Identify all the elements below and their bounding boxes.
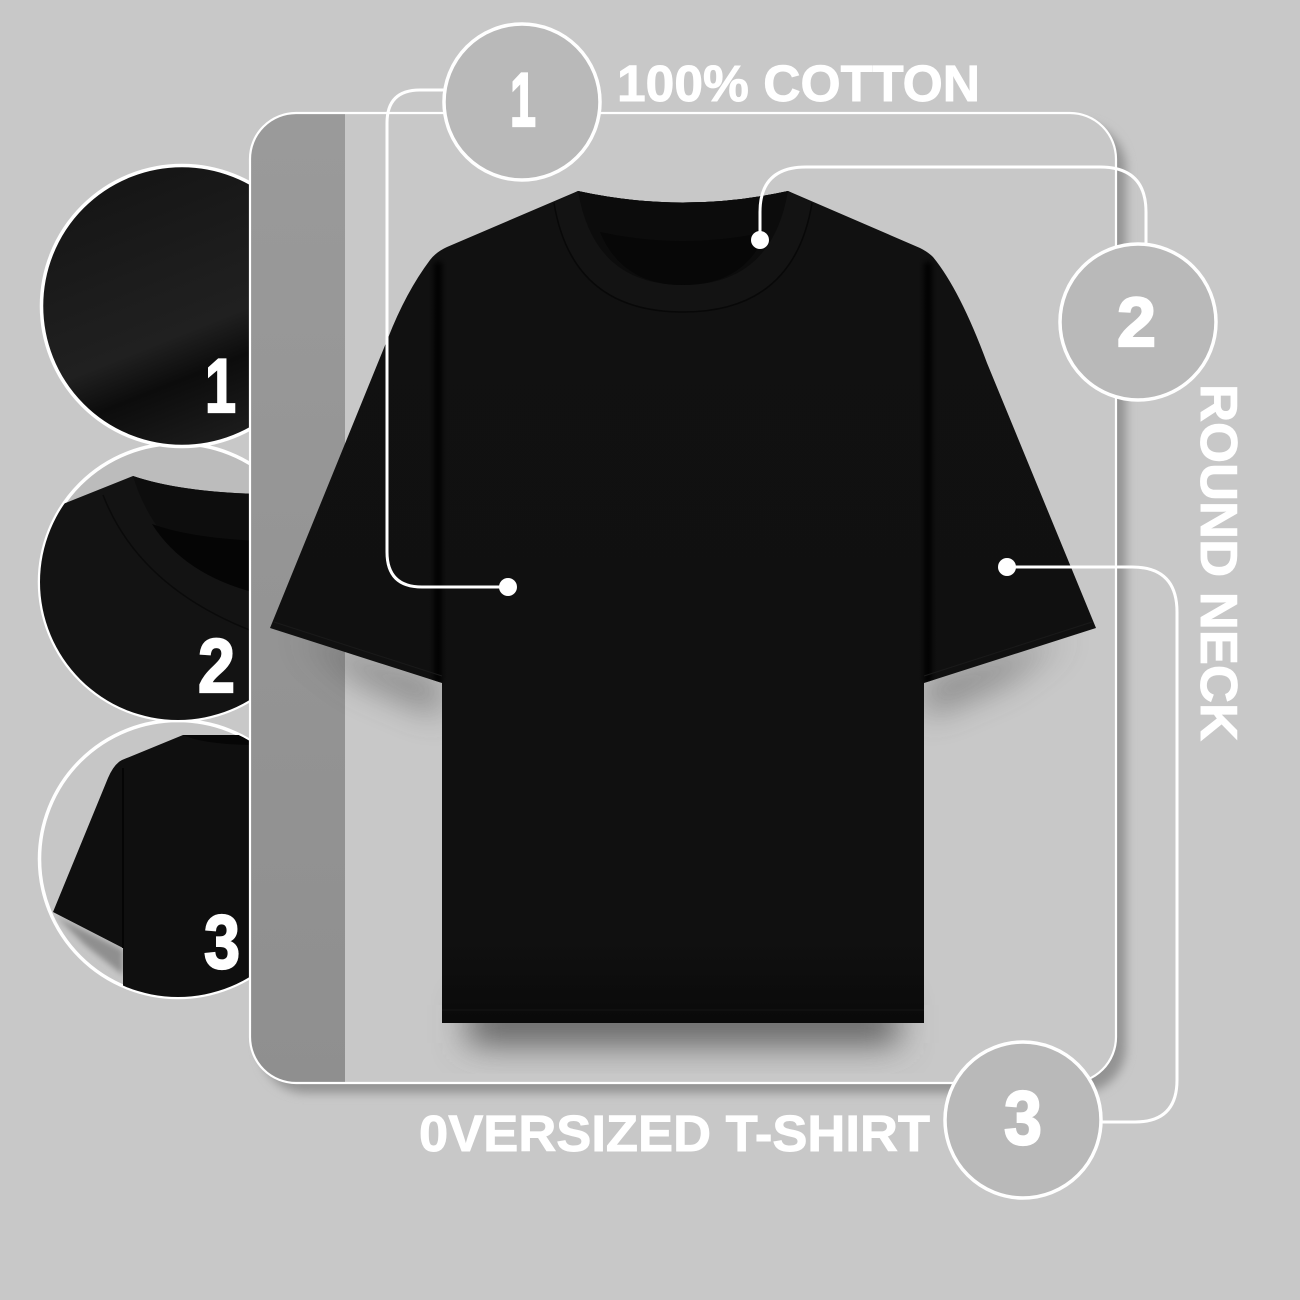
- t-shirt: [270, 191, 1096, 1023]
- detail circle 2: collar view: [38, 444, 249, 722]
- badge 2: [1060, 244, 1216, 400]
- collar seam: [554, 203, 812, 312]
- collar ribbing: [554, 191, 812, 312]
- badge 1: [444, 24, 600, 180]
- panel: backdrop with grey strip and rounded outline: [250, 113, 1126, 1093]
- detail circle 1: fabric close-up: [42, 166, 322, 446]
- detail circle 3: sleeve view: 3: [204, 900, 240, 985]
- t-shirt shadow: [300, 635, 1068, 1043]
- detail circle 3: sleeve view: [38, 720, 249, 1000]
- label: oversized t-shirt: 0VERSIZED T-SHIRT: [419, 1105, 930, 1162]
- detail circle 2: collar view: 2: [198, 624, 235, 709]
- badge 3: [945, 1042, 1101, 1198]
- badge 1: 1: [510, 58, 536, 143]
- badge 2: 2: [1117, 283, 1156, 361]
- sleeve seams: [438, 262, 928, 683]
- callout line 3: sleeve: [998, 558, 1177, 1122]
- label: round neck: ROUND NECK: [1189, 384, 1247, 741]
- inner neck below tape: [600, 232, 766, 285]
- callout line 1: cotton: [387, 90, 517, 596]
- label: 100% cotton: 100% COTTON: [617, 55, 980, 112]
- badge 3: 3: [1004, 1076, 1042, 1161]
- detail circle 1: fabric close-up: 1: [205, 344, 236, 429]
- callout line 2: neck: [751, 167, 1146, 249]
- back of neck: [578, 191, 788, 285]
